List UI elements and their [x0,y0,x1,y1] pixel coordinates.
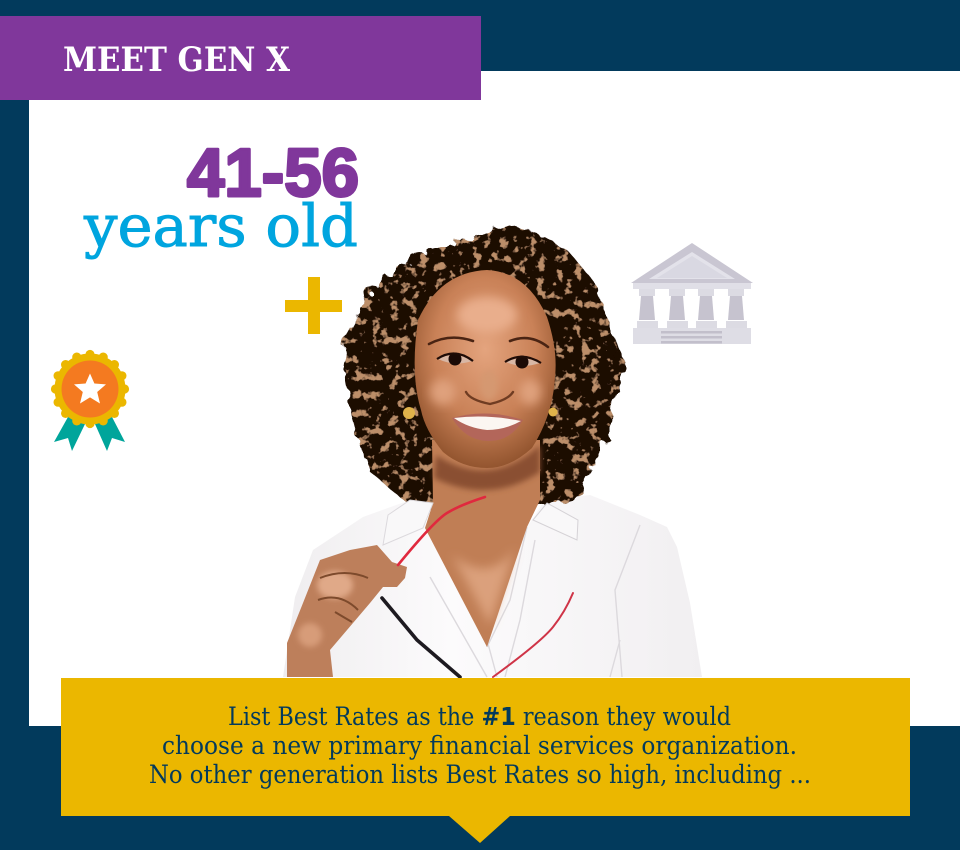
cheek highlights [430,379,456,405]
eyes [437,352,541,368]
earrings [403,407,415,419]
eyebrows [429,338,473,344]
nose [480,370,498,400]
title banner [0,16,481,100]
glasses [382,497,573,677]
shirt [283,495,702,677]
hand highlights [317,571,353,599]
icon: award ribbon medal [51,350,129,451]
shirt folds [430,525,640,677]
shirt collar [383,500,578,545]
face [415,270,556,468]
icon: plus sign [285,277,342,334]
white content panel [29,71,960,726]
hand [287,545,407,677]
mouth [452,413,523,441]
title banner: MEET GEN X [63,40,291,80]
callout text: choose a new primary financial services organization. [162,731,797,760]
age heading: years old [83,192,358,260]
callout text: List Best Rates as the #1 reason they would [228,702,731,731]
callout box [61,678,910,843]
callout text: No other generation lists Best Rates so high, including ... [149,760,811,789]
hair mass [343,226,626,512]
neck and chest [425,440,540,647]
icon: bank building [631,243,753,344]
age heading [83,135,359,260]
callout text [149,702,811,789]
age heading: 41-56 [187,135,359,211]
portrait: smiling woman holding glasses [283,226,702,677]
forehead highlight [457,297,517,333]
